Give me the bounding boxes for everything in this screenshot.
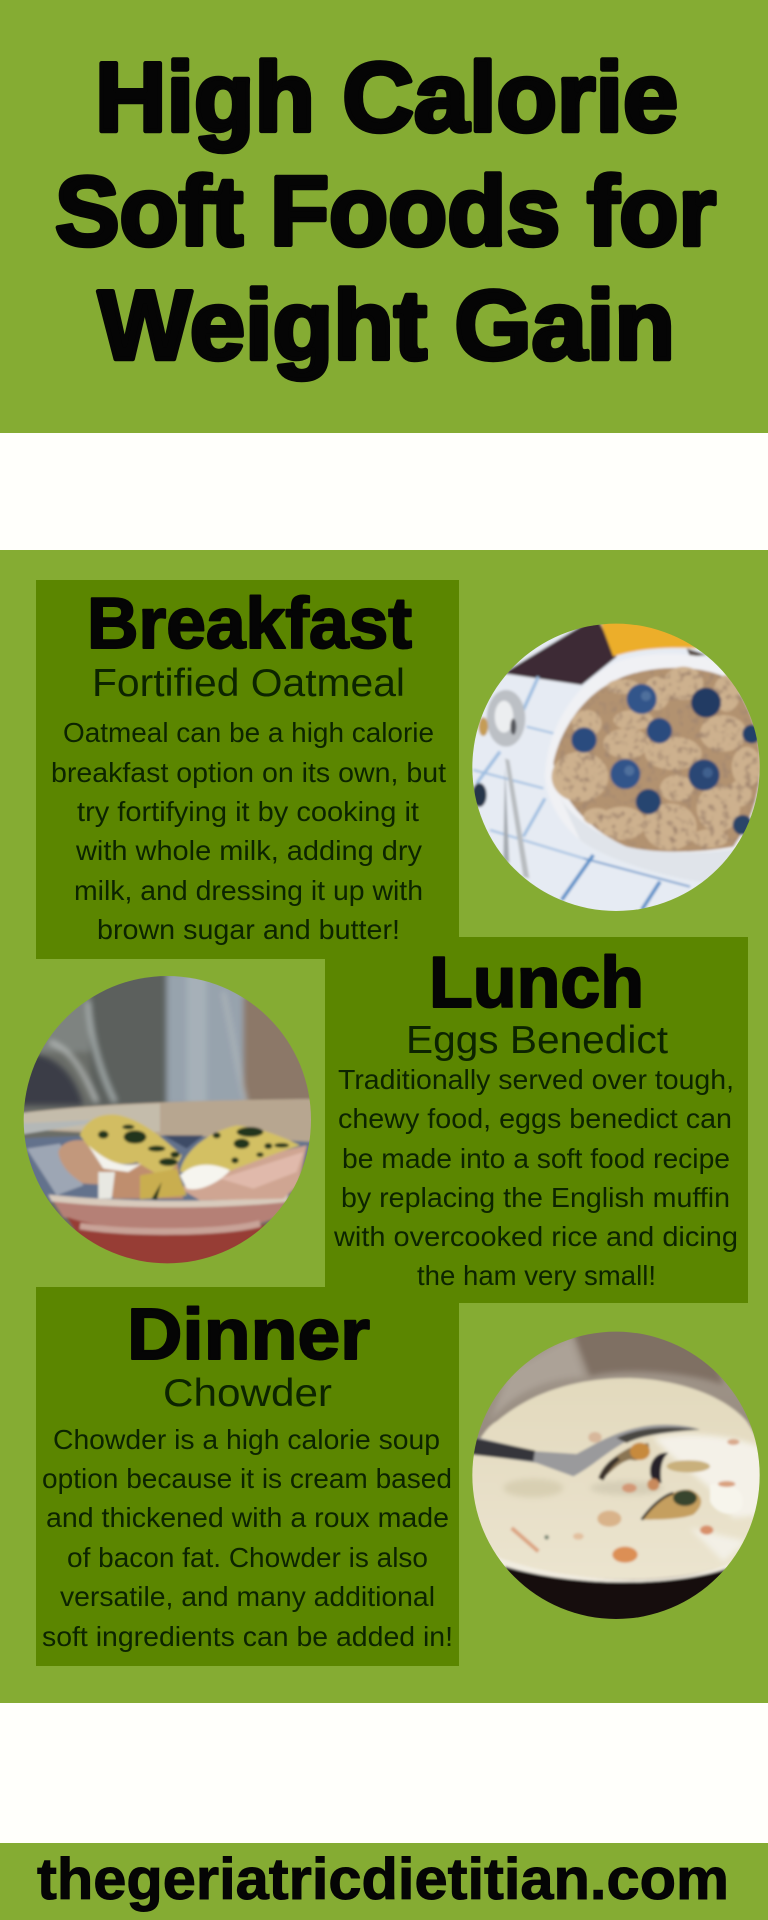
title: High Calorie [95, 42, 678, 152]
panel: breakfast [36, 580, 459, 959]
heading: breakfast: Breakfast [87, 584, 412, 664]
website url: thegeriatricdietitian.com [37, 1847, 729, 1912]
heading: lunch: Lunch [429, 943, 644, 1023]
text block: lunch description [333, 1064, 738, 1291]
main green panel [0, 550, 768, 1703]
text block: lunch description: chewy food, eggs benedict can [338, 1103, 732, 1134]
text block: lunch description: the ham very small! [417, 1260, 656, 1291]
text block: lunch description: Traditionally served over tough, [338, 1064, 734, 1095]
photo: eggs benedict [24, 976, 311, 1264]
text block: breakfast description: milk, and dressing it up with [74, 875, 423, 906]
footer bar [0, 1843, 768, 1920]
text block: breakfast description: with whole milk, adding dry [75, 835, 422, 866]
text block: breakfast description: try fortifying it by cooking it [77, 796, 419, 827]
panel: dinner [36, 1287, 459, 1666]
text block: dinner description: soft ingredients can be added in! [42, 1621, 453, 1652]
text block: lunch description: be made into a soft food recipe [342, 1143, 730, 1174]
photo: chowder [472, 1332, 760, 1619]
text block: dinner description: and thickened with a roux made [46, 1502, 449, 1533]
text block: dinner description: Chowder is a high calorie soup [53, 1424, 440, 1455]
text block: dinner description: versatile, and many additional [60, 1581, 435, 1612]
text block: lunch description: with overcooked rice and dicing [333, 1221, 738, 1252]
text block: breakfast description: breakfast option on its own, but [51, 757, 446, 788]
title: Weight Gain [98, 270, 675, 380]
text block: breakfast description: brown sugar and butter! [97, 914, 400, 945]
subheading: fortified oatmeal: Fortified Oatmeal [92, 662, 405, 705]
subheading: chowder: Chowder [163, 1372, 332, 1415]
text block: dinner description: of bacon fat. Chowder is also [67, 1542, 428, 1573]
title [55, 42, 716, 380]
text block: lunch description: by replacing the English muffin [341, 1182, 730, 1213]
title banner [0, 0, 768, 433]
text block: breakfast description [51, 717, 446, 945]
title: Soft Foods for [55, 156, 716, 266]
text block: dinner description: option because it is cream based [42, 1463, 452, 1494]
text block: breakfast description: Oatmeal can be a high calorie [63, 717, 434, 748]
heading: dinner: Dinner [127, 1295, 370, 1375]
text block: dinner description [42, 1424, 453, 1652]
photo: oatmeal with blueberries [472, 624, 760, 911]
panel: lunch [325, 937, 748, 1303]
subheading: eggs benedict: Eggs Benedict [406, 1019, 668, 1062]
